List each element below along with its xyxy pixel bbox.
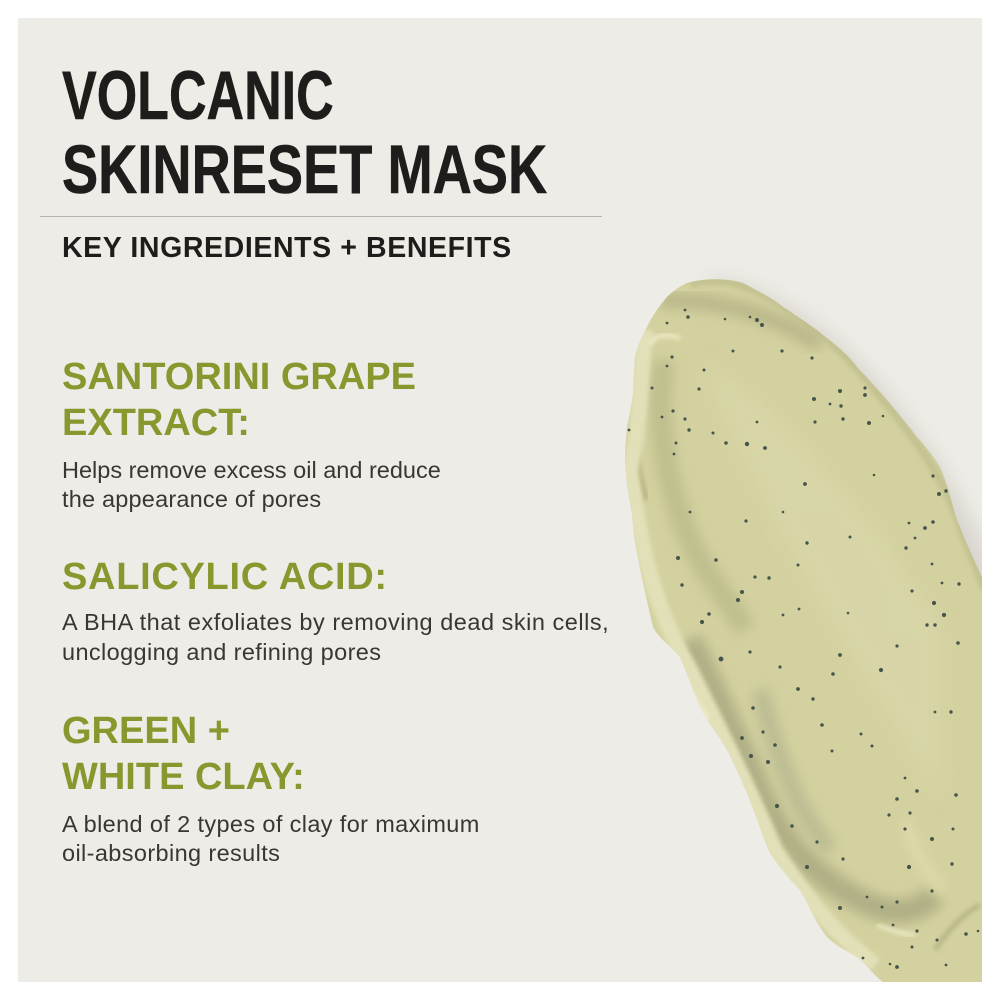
text: Santorini benefit [62,457,441,512]
title [62,57,548,208]
text: Salicylic benefit: unclogging and refining pores [62,639,381,665]
heading: Santorini grape extract: EXTRACT: [62,402,250,444]
subheading: KEY INGREDIENTS + BENEFITS [62,232,512,264]
divider [40,216,602,217]
text: Clay benefit: A blend of 2 types of clay for maximum [62,811,480,837]
specks [628,309,979,969]
heading: Green + white clay [62,710,305,798]
heading: Green + white clay: GREEN + [62,710,230,752]
text: Clay benefit [62,811,480,866]
soft tonal zones [916,618,922,634]
heading: Green + white clay: WHITE CLAY: [62,756,305,798]
title: VOLCANIC [62,57,334,134]
heading: Santorini grape extract [62,356,416,444]
image: mask swatch [625,278,982,982]
heading: Santorini grape extract: SANTORINI GRAPE [62,356,416,398]
text: Salicylic benefit: A BHA that exfoliates by removing dead skin cells, [62,609,609,635]
text: Clay benefit: oil-absorbing results [62,840,280,866]
title: SKINRESET MASK [62,131,547,208]
heading: Salicylic acid: SALICYLIC ACID: [62,556,388,598]
text: Santorini benefit: the appearance of pores [62,486,321,512]
text: Santorini benefit: Helps remove excess oil and reduce [62,457,441,483]
text: Salicylic benefit [62,609,609,665]
